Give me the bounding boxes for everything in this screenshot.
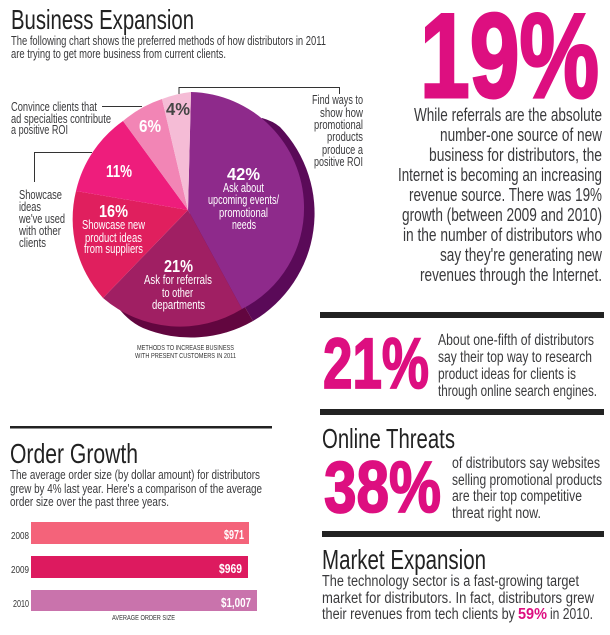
bar: 2008: $971 [224, 528, 244, 542]
callout: find ways: promotional [314, 118, 363, 132]
callout: convince clients: Convince clients that [11, 100, 97, 114]
chart caption: WITH PRESENT CUSTOMERS IN 2011 [135, 351, 236, 360]
order growth text: The average order size (by dollar amount) for distributors [10, 467, 260, 482]
21 percent text [438, 332, 597, 400]
callout: find ways: positive ROI [314, 155, 363, 169]
market expansion text: in 2010. [550, 606, 593, 623]
market expansion text [322, 573, 595, 623]
callout: convince clients: a positive ROI [11, 123, 68, 137]
callout: find ways [179, 88, 364, 169]
label: 16 percent: product ideas [85, 231, 142, 245]
heading: business expansion: Business Expansion [11, 4, 194, 35]
bar: 2009: 2009 [11, 564, 29, 576]
callout: find ways: show how [320, 106, 364, 120]
order growth text [10, 467, 262, 509]
callout: convince clients [11, 100, 142, 137]
label: 11 percent: 11% [106, 161, 132, 181]
label: 16 percent: from suppliers [84, 242, 143, 256]
panel: 21 percent [320, 312, 604, 404]
38 percent text: threat right now. [452, 505, 541, 522]
label: 21 percent: 21% [164, 256, 193, 276]
bar: 2009: $969 [219, 562, 242, 576]
big number: 38 percent: 38% [324, 448, 441, 528]
label: 42 percent: promotional [219, 206, 268, 220]
chart caption [135, 343, 236, 360]
heading: market expansion: Market Expansion [322, 544, 486, 575]
callout: showcase ideas: with other [18, 224, 61, 238]
pie shadow [120, 118, 315, 338]
panel: order growth [10, 426, 272, 622]
slice: 6 percent [123, 99, 188, 210]
slice: 16 percent [73, 191, 188, 298]
label: 16 percent: 16% [99, 201, 128, 221]
callout: find ways: products [327, 130, 363, 144]
bar: 2010: $1,007 [221, 596, 251, 610]
callout: showcase ideas: Showcase [19, 188, 62, 202]
label: 21 percent: departments [152, 298, 205, 312]
label: 16 percent: Showcase new [82, 218, 146, 232]
panel: online threats [320, 409, 604, 528]
panel: market expansion [322, 531, 604, 623]
slice: 4 percent [162, 92, 191, 210]
heading: order growth: Order Growth [10, 438, 138, 469]
panel: business expansion [11, 4, 364, 360]
market expansion text: their revenues from tech clients by [322, 606, 515, 623]
callout: showcase ideas [18, 152, 92, 250]
label: 21 percent [144, 256, 212, 312]
label: 16 percent [82, 201, 146, 256]
38 percent text [452, 455, 602, 522]
callout: showcase ideas: ideas [19, 200, 41, 214]
bar: 2009 [11, 556, 248, 578]
callout: find ways: produce a [322, 143, 363, 157]
heading: online threats: Online Threats [322, 423, 455, 454]
slice: 21 percent [103, 210, 242, 327]
bar: 2010 [13, 590, 257, 611]
callout: convince clients: ad specialties contribute [11, 112, 111, 126]
chart caption: METHODS TO INCREASE BUSINESS [137, 343, 234, 352]
order growth text: order size over the past three years. [10, 494, 169, 509]
bar chart [11, 522, 257, 622]
label: 4 percent: 4% [166, 99, 190, 119]
order growth text: grew by 4% last year. Here's a comparison of the average [10, 481, 262, 496]
bar: 2008 [11, 522, 249, 544]
bar: 2010: 2010 [13, 598, 29, 610]
label: 42 percent [208, 164, 279, 232]
intro text [11, 34, 326, 61]
label: 6 percent: 6% [139, 116, 161, 136]
label: 42 percent: 42% [227, 164, 260, 184]
label: 42 percent: Ask about [223, 181, 264, 195]
callout: showcase ideas: we've used [18, 212, 65, 226]
panel: 19 percent [398, 0, 602, 285]
pie chart [73, 92, 315, 338]
intro text: The following chart shows the preferred methods of how distributors in 2011 [11, 34, 326, 48]
label: 42 percent: needs [232, 218, 256, 232]
slice: 42 percent [188, 92, 304, 309]
callout: find ways: Find ways to [312, 93, 363, 107]
axis caption: AVERAGE ORDER SIZE [112, 613, 175, 622]
market expansion text: 59% [518, 606, 547, 623]
bar: 2008: 2008 [11, 530, 29, 542]
intro text: are trying to get more business from current clients. [11, 47, 226, 61]
19 percent text [398, 104, 602, 285]
label: 42 percent: upcoming events/ [208, 193, 279, 207]
label: 21 percent: to other [162, 286, 193, 300]
callout: showcase ideas: clients [19, 236, 46, 250]
slice: 11 percent [76, 121, 188, 210]
big number: 21 percent: 21% [323, 325, 429, 404]
label: 21 percent: Ask for referrals [144, 273, 212, 287]
